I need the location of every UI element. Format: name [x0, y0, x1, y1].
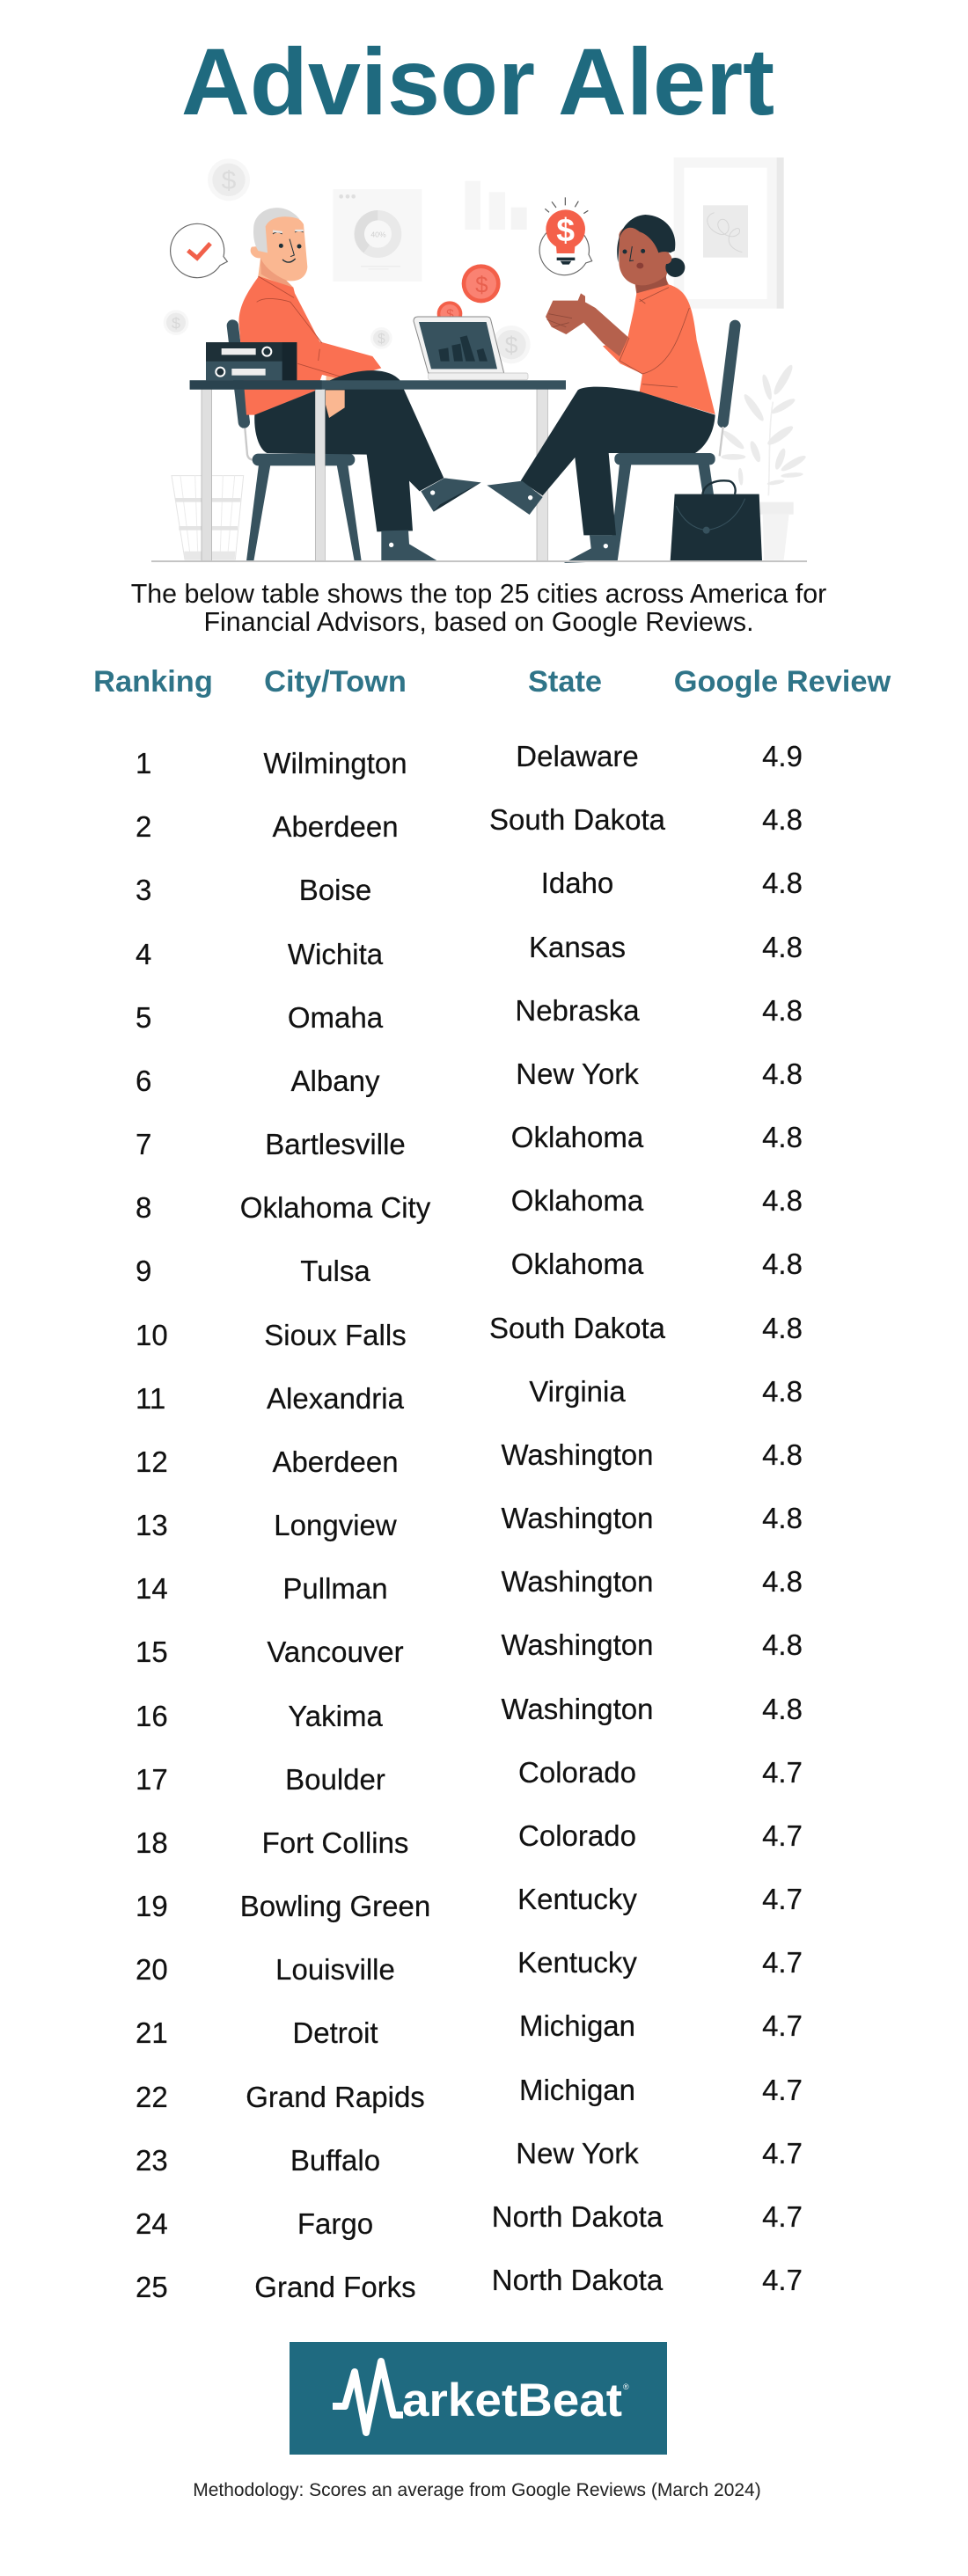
icon: dollar lightbulb: $ [556, 211, 575, 248]
row 12: Washington [501, 1438, 654, 1471]
row 17: 17 [136, 1763, 168, 1796]
row 6: New York [516, 1057, 639, 1090]
row 19: 19 [136, 1890, 168, 1922]
row 8: Oklahoma City [240, 1191, 430, 1224]
row 18: Colorado [518, 1819, 636, 1852]
row 7: Oklahoma [511, 1121, 643, 1153]
icon: handbag [671, 480, 762, 561]
row 25: Grand Forks [254, 2271, 416, 2303]
illustration: two people at a desk [151, 157, 807, 563]
row 5: 5 [136, 1001, 151, 1034]
row 2: 4.8 [762, 803, 803, 836]
ground line [151, 560, 807, 562]
row 13: Washington [501, 1502, 654, 1534]
faint coin behind laptop [492, 326, 531, 363]
background decor: $ [172, 314, 180, 332]
row 23: New York [516, 2137, 639, 2170]
title: Advisor Alert [181, 28, 774, 135]
table [190, 380, 566, 561]
row 20: Kentucky [517, 1946, 637, 1979]
row 25: 25 [136, 2271, 168, 2303]
row 19: 4.7 [762, 1883, 803, 1915]
row 3: Idaho [541, 867, 613, 899]
row 20: Louisville [275, 1953, 395, 1986]
row 16: Washington [501, 1693, 654, 1725]
row 15: 4.8 [762, 1628, 803, 1661]
row 9: Tulsa [300, 1255, 370, 1287]
icon: red coins: $ [475, 272, 488, 298]
row 15 [136, 1628, 803, 1668]
row 6 [136, 1057, 803, 1098]
row 17 [136, 1756, 803, 1796]
row 7: Bartlesville [265, 1128, 406, 1160]
row 21: 4.7 [762, 2009, 803, 2042]
row 4: Wichita [288, 938, 383, 970]
row 24: North Dakota [492, 2200, 663, 2233]
row 1: Delaware [516, 740, 639, 772]
row 9 [136, 1248, 803, 1287]
row 4: 4 [136, 938, 151, 970]
row 3: 4.8 [762, 867, 803, 899]
row 19 [136, 1883, 803, 1923]
text: State [528, 665, 602, 699]
row 23: 4.7 [762, 2137, 803, 2170]
row 21: Detroit [292, 2016, 378, 2049]
row 13: 13 [136, 1509, 168, 1541]
row 10: 4.8 [762, 1312, 803, 1344]
row 18: 18 [136, 1826, 168, 1859]
row 13 [136, 1502, 803, 1541]
row 8: Oklahoma [511, 1184, 643, 1217]
row 11: 11 [136, 1382, 165, 1415]
row 3: Boise [299, 874, 371, 906]
row 8: 4.8 [762, 1184, 803, 1217]
row 17: Boulder [285, 1763, 385, 1796]
row 22: Michigan [519, 2074, 635, 2106]
row 20 [136, 1946, 803, 1986]
row 4: Kansas [529, 931, 626, 962]
intro text: The below table shows the top 25 cities across America for [131, 579, 826, 609]
woman figure [487, 215, 715, 563]
row 24: 24 [136, 2207, 168, 2240]
row 2: 2 [136, 810, 151, 843]
icon: binders [206, 342, 297, 380]
row 2: South Dakota [489, 803, 665, 836]
row 17: 4.7 [762, 1756, 803, 1789]
MarketBeat logo [290, 2342, 667, 2455]
intro text: Financial Advisors, based on Google Reviews. [203, 607, 754, 637]
row 20: 20 [136, 1953, 168, 1986]
row 7 [136, 1121, 803, 1160]
row 21: Michigan [519, 2009, 635, 2042]
row 20: 4.7 [762, 1946, 803, 1979]
icon: laptop [414, 317, 528, 380]
icon: red coins: $ [446, 308, 454, 323]
row 22: 22 [136, 2081, 168, 2113]
row 8 [136, 1184, 803, 1225]
row 22: Grand Rapids [246, 2081, 425, 2113]
row 23 [136, 2137, 803, 2177]
row 24: 4.7 [762, 2200, 803, 2233]
row 21 [136, 2009, 803, 2049]
row 2 [136, 803, 803, 843]
table header [93, 665, 891, 699]
row 12: 12 [136, 1445, 168, 1478]
row 3 [136, 867, 803, 906]
row 15: 15 [136, 1636, 168, 1668]
row 23: Buffalo [290, 2144, 380, 2177]
row 18 [136, 1819, 803, 1859]
row 9: 9 [136, 1255, 151, 1287]
row 3: 3 [136, 874, 151, 906]
row 16 [136, 1693, 803, 1732]
row 5: Nebraska [515, 994, 640, 1027]
row 6: 4.8 [762, 1057, 803, 1090]
row 12: 4.8 [762, 1438, 803, 1471]
row 6: 6 [136, 1065, 151, 1097]
row 13: 4.8 [762, 1502, 803, 1534]
row 2: Aberdeen [272, 810, 399, 843]
row 1: 1 [136, 747, 151, 779]
row 7: 4.8 [762, 1121, 803, 1153]
faint coin behind laptop: $ [505, 333, 518, 359]
row 9: 4.8 [762, 1248, 803, 1280]
background decor [164, 157, 808, 560]
table back leg [537, 387, 547, 561]
row 21: 21 [136, 2016, 168, 2049]
row 23: 23 [136, 2144, 168, 2177]
row 8: 8 [136, 1191, 151, 1224]
row 14 [136, 1565, 803, 1605]
row 19: Kentucky [517, 1883, 637, 1915]
row 4: 4.8 [762, 931, 803, 962]
row 6: Albany [291, 1065, 379, 1097]
row 24: Fargo [297, 2207, 373, 2240]
row 1: 4.9 [762, 740, 803, 772]
methodology note: Methodology: Scores an average from Google Reviews (March 2024) [193, 2480, 761, 2500]
row 12: Aberdeen [272, 1445, 399, 1478]
icon: check speech bubble [171, 223, 227, 278]
row 25: 4.7 [762, 2264, 803, 2296]
row 10: 10 [136, 1319, 168, 1351]
icon: dollar lightbulb [539, 197, 592, 275]
row 5 [136, 994, 803, 1034]
row 16: 4.8 [762, 1693, 803, 1725]
row 5: 4.8 [762, 994, 803, 1027]
row 10 [136, 1312, 803, 1351]
MarketBeat logo: arketBeat [402, 2375, 622, 2426]
background decor: $ [378, 332, 385, 347]
row 14: Pullman [282, 1572, 388, 1605]
row 1: Wilmington [263, 747, 407, 779]
row 16: Yakima [288, 1700, 383, 1732]
row 24 [136, 2200, 803, 2240]
row 9: Oklahoma [511, 1248, 643, 1280]
row 10: South Dakota [489, 1312, 665, 1344]
row 10: Sioux Falls [264, 1319, 407, 1351]
row 22 [136, 2074, 803, 2113]
man chair [232, 326, 362, 561]
row 16: 16 [136, 1700, 168, 1732]
row 18: 4.7 [762, 1819, 803, 1852]
row 4 [136, 931, 803, 970]
row 15: Washington [501, 1628, 654, 1661]
row 14: 4.8 [762, 1565, 803, 1598]
row 25: North Dakota [492, 2264, 663, 2296]
man figure [238, 208, 481, 561]
row 5: Omaha [288, 1001, 383, 1034]
row 25 [136, 2264, 803, 2303]
row 17: Colorado [518, 1756, 636, 1789]
row 18: Fort Collins [262, 1826, 408, 1859]
row 11 [136, 1375, 803, 1415]
row 11: Alexandria [267, 1382, 404, 1415]
row 22: 4.7 [762, 2074, 803, 2106]
row 12 [136, 1438, 803, 1478]
text: City/Town [264, 665, 407, 699]
row 19: Bowling Green [240, 1890, 430, 1922]
row 11: 4.8 [762, 1375, 803, 1408]
icon: red coins [437, 264, 501, 326]
row 15: Vancouver [267, 1636, 404, 1668]
row 7: 7 [136, 1128, 151, 1160]
background decor: 40% [370, 230, 386, 238]
row 11: Virginia [529, 1375, 626, 1408]
row 14: Washington [501, 1565, 654, 1598]
woman chair [610, 326, 735, 561]
intro text [131, 579, 826, 637]
MarketBeat logo: ® [623, 2382, 629, 2391]
text: Google Review [674, 665, 891, 699]
row 14: 14 [136, 1572, 168, 1605]
background decor: $ [222, 166, 237, 195]
row 13: Longview [274, 1509, 397, 1541]
row 1 [136, 740, 803, 779]
text: Ranking [93, 665, 213, 699]
